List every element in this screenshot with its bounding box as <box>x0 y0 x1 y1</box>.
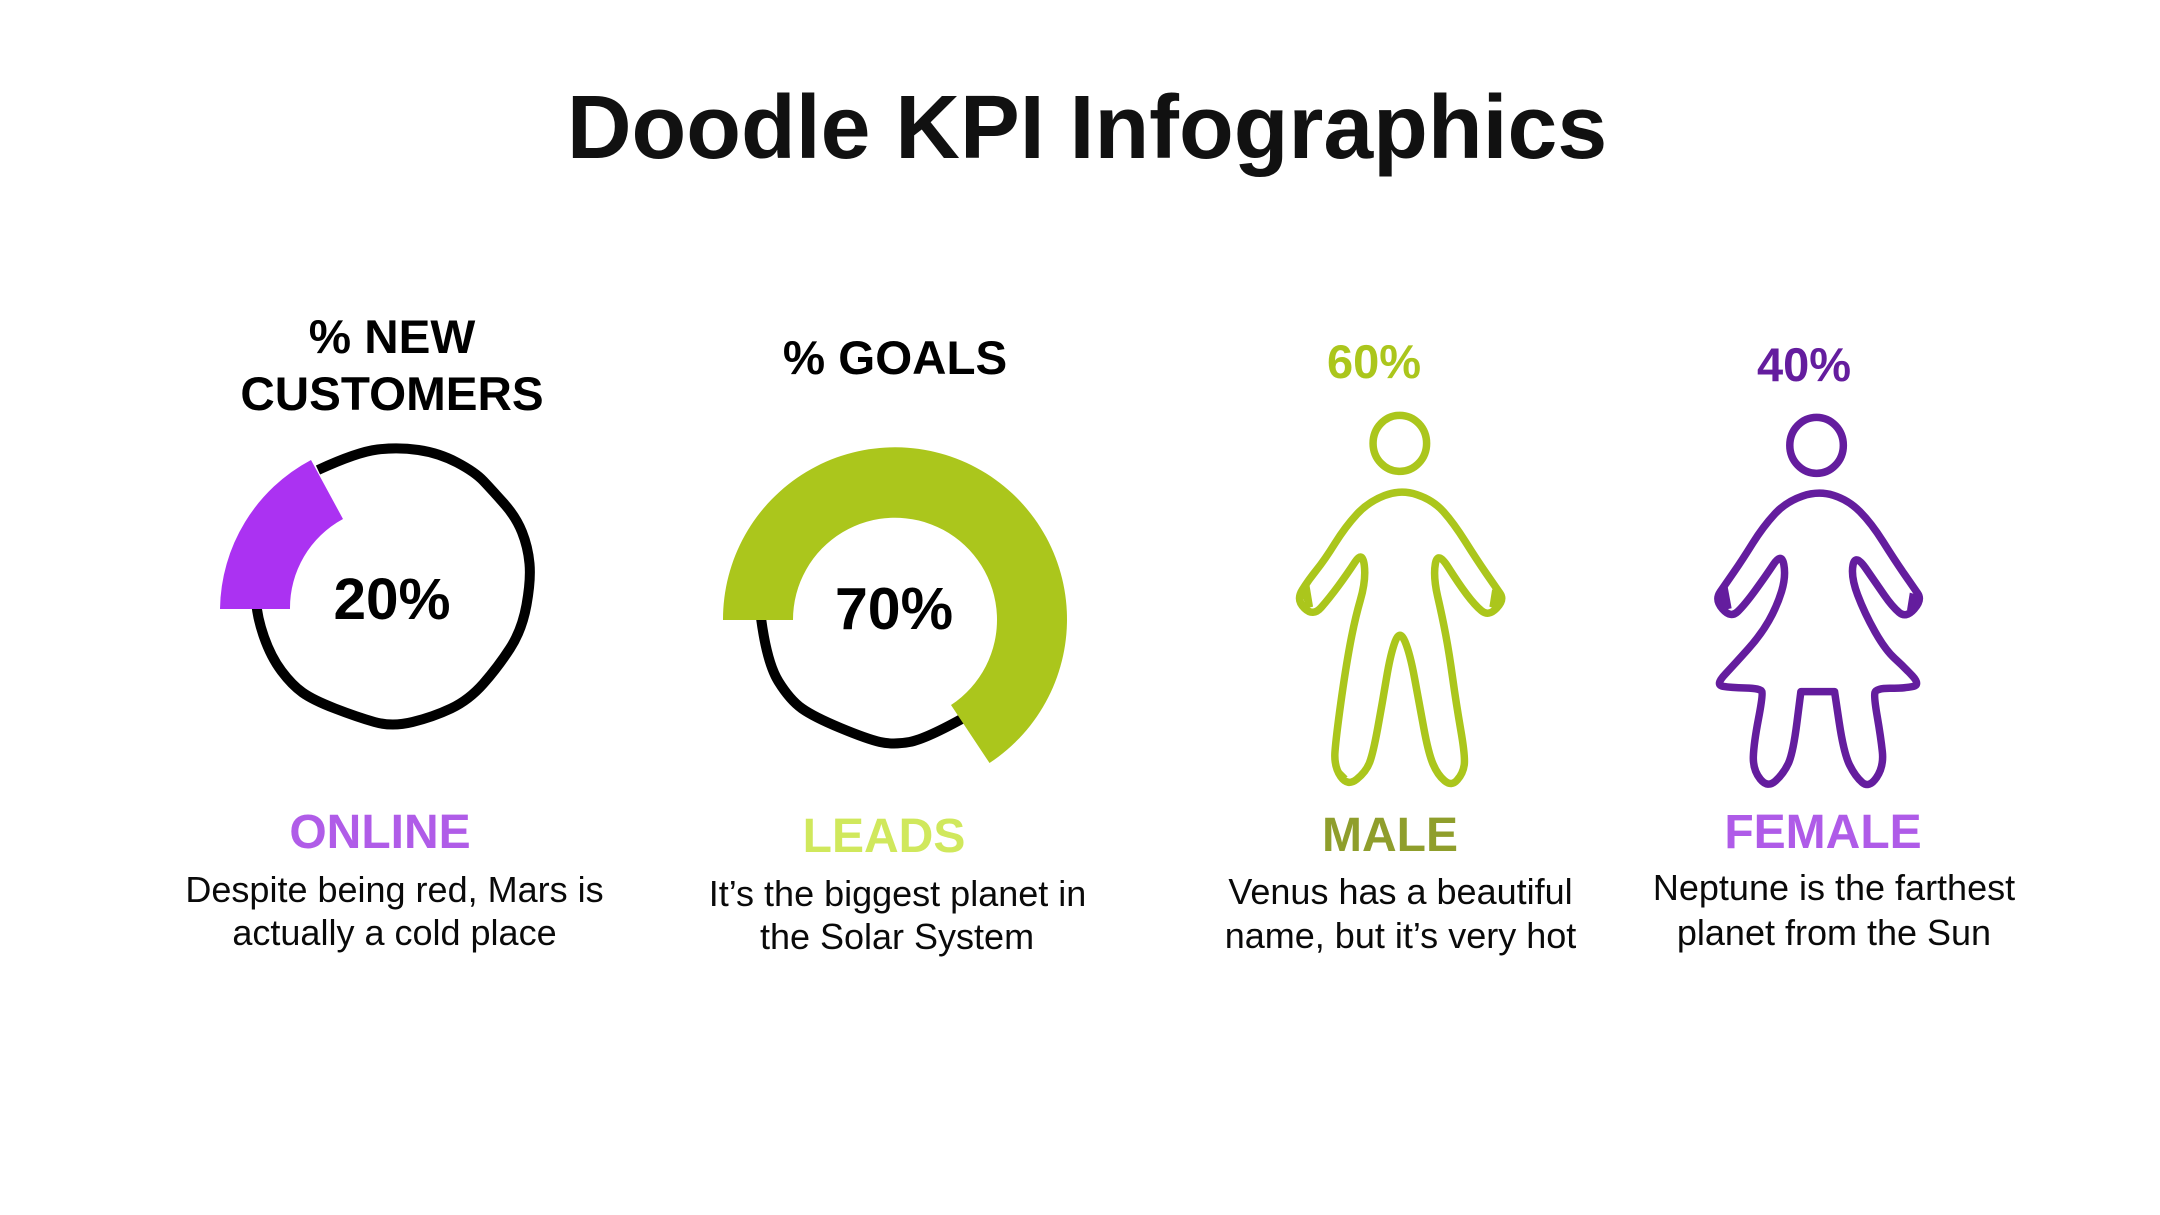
title: Doodle KPI Infographics <box>567 77 1607 177</box>
label: female: FEMALE <box>1724 806 1922 859</box>
panel: female <box>1653 338 2015 953</box>
description: male: name, but it’s very hot <box>1225 915 1576 956</box>
description: female: planet from the Sun <box>1677 912 1991 953</box>
description: leads <box>709 873 1086 957</box>
icon: female figure <box>1718 417 1919 784</box>
description: male <box>1225 871 1576 956</box>
panel: new customers <box>185 311 604 953</box>
panel: male <box>1225 335 1576 956</box>
heading: % goals: % GOALS <box>783 332 1007 385</box>
description: female <box>1653 867 2015 953</box>
heading: % new customers: % NEW <box>309 311 475 364</box>
donut chart: 70%: 70% <box>835 576 953 642</box>
panel: goals <box>709 332 1086 957</box>
description: leads: It’s the biggest planet in <box>709 873 1086 914</box>
donut chart: 20%: 20% <box>333 567 451 632</box>
donut chart: 70% <box>723 447 1067 763</box>
description: leads: the Solar System <box>760 916 1034 957</box>
donut chart: 20% <box>220 448 530 724</box>
label: male: MALE <box>1322 809 1458 862</box>
label: online: ONLINE <box>289 806 471 859</box>
value: 40%: 40% <box>1757 338 1851 391</box>
description: female: Neptune is the farthest <box>1653 867 2015 908</box>
description: online <box>185 869 604 953</box>
description: online: Despite being red, Mars is <box>185 869 604 910</box>
heading: % new customers: CUSTOMERS <box>240 368 544 421</box>
label: leads: LEADS <box>803 810 965 863</box>
icon: male figure <box>1300 415 1502 784</box>
description: online: actually a cold place <box>232 912 557 953</box>
heading: % new customers <box>240 311 544 421</box>
description: male: Venus has a beautiful <box>1228 871 1573 912</box>
value: 60%: 60% <box>1327 335 1421 388</box>
